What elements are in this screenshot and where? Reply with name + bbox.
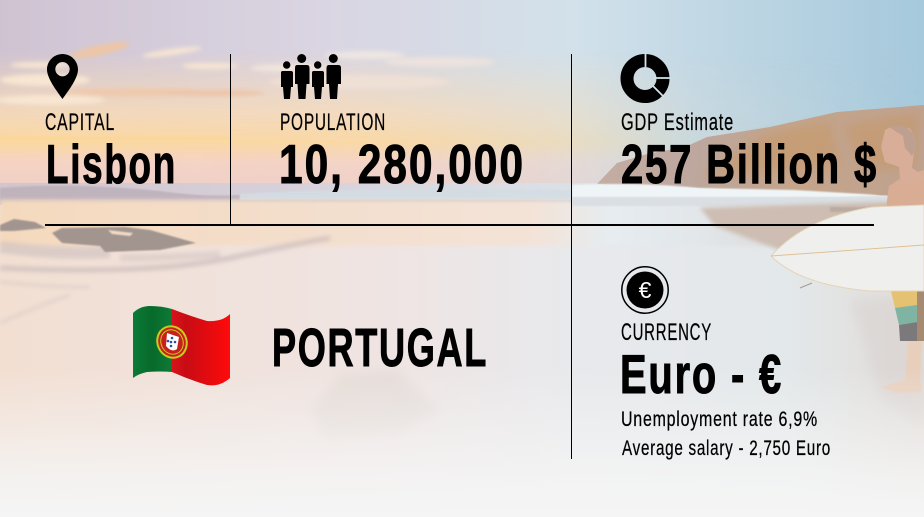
text: average salary: Average salary - 2,750 Euro	[622, 437, 831, 460]
panel: country	[133, 306, 488, 385]
label: population: POPULATION	[280, 109, 386, 136]
surfer and surfboard	[771, 126, 924, 430]
text: unemployment rate: Unemployment rate 6,9%	[621, 408, 818, 431]
icon: donut chart	[627, 52, 671, 97]
beach sand	[0, 205, 924, 517]
panel: currency	[620, 267, 831, 460]
label: capital: CAPITAL	[45, 109, 115, 136]
foam streaks	[0, 238, 330, 323]
value: Euro: Euro - €	[620, 343, 783, 405]
panel: GDP estimate	[621, 52, 878, 195]
icon: four people	[281, 54, 341, 99]
cliff on the right	[597, 105, 924, 197]
panel: capital	[45, 54, 177, 195]
value: population figure: 10, 280,000	[279, 133, 525, 195]
value: Lisbon: Lisbon	[46, 133, 177, 195]
icon: map pin	[47, 54, 78, 99]
divider lines	[45, 54, 874, 459]
distant rocks	[0, 219, 196, 252]
label: GDP estimate: GDP Estimate	[621, 109, 734, 136]
submerged rock reflection	[310, 370, 440, 440]
heading: Portugal: PORTUGAL	[272, 318, 488, 378]
panel: population	[279, 54, 525, 195]
icon: euro coin	[622, 267, 668, 313]
sea and waves	[0, 183, 924, 207]
label: currency: CURRENCY	[621, 319, 712, 346]
icon: euro coin: €	[639, 277, 652, 303]
icon: Portuguese flag	[133, 306, 230, 385]
